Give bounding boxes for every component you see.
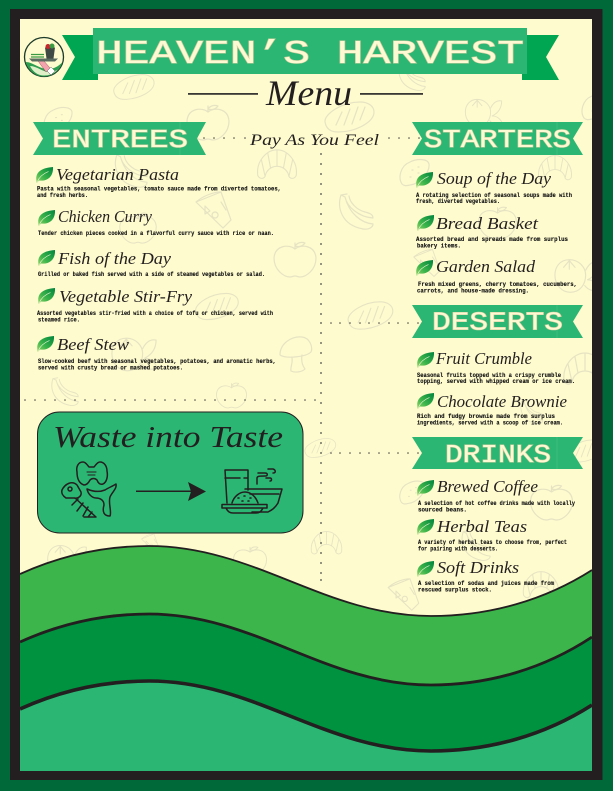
drinks banner: DRINKS xyxy=(445,440,551,470)
item: brewed coffee: sourced beans. xyxy=(418,506,467,514)
entrees banner: ENTREES xyxy=(52,125,188,155)
ribbon tail left xyxy=(62,35,98,80)
item: fish of the day xyxy=(38,249,265,278)
item: chocolate brownie: Chocolate Brownie xyxy=(437,392,567,411)
item: brewed coffee: Brewed Coffee xyxy=(437,477,538,496)
item: chocolate brownie: Rich and fudgy brownie made from surplus xyxy=(417,413,555,420)
item: fish of the day: Grilled or baked fish served with a side of steamed vegetables or salad. xyxy=(38,271,265,278)
item: chocolate brownie xyxy=(417,392,567,426)
item: soup of the day: Soup of the Day xyxy=(437,169,551,188)
item: brewed coffee: A selection of hot coffee drinks made with locally xyxy=(418,500,575,507)
item: bread basket: Assorted bread and spreads made from surplus xyxy=(416,236,568,243)
ribbon main band xyxy=(93,28,527,74)
item: vegetarian pasta xyxy=(36,165,281,199)
wave: mid green xyxy=(20,612,592,750)
item: brewed coffee xyxy=(417,477,575,514)
item: soft drinks: A selection of sodas and juices made from xyxy=(418,580,554,587)
item: soup of the day: fresh, diverted vegetables. xyxy=(416,198,500,205)
item: vegetarian pasta: and fresh herbs. xyxy=(37,192,88,199)
icon: meal xyxy=(222,469,282,513)
item: bread basket: bakery items. xyxy=(417,242,461,250)
item: herbal teas: Herbal Teas xyxy=(436,517,527,536)
item: vegetable stir-fry xyxy=(37,287,273,324)
ribbon tail right xyxy=(522,35,559,80)
item: beef stew: Slow-cooked beef with seasonal vegetables, potatoes, and aromatic herbs, xyxy=(38,358,276,365)
item: fruit crumble: Fruit Crumble xyxy=(435,349,532,368)
menu word: Menu xyxy=(265,73,352,113)
header ribbon xyxy=(62,28,559,80)
item: herbal teas xyxy=(417,517,567,552)
entrees banner xyxy=(33,122,206,155)
item: soup of the day xyxy=(416,169,572,205)
deserts banner: DESERTS xyxy=(432,308,563,338)
panel: drinks items xyxy=(417,477,575,594)
wave: light green xyxy=(20,545,592,684)
item: garden salad: carrots, and house-made dressing. xyxy=(417,288,529,294)
item: soup of the day: A rotating selection of seasonal soups made with xyxy=(416,192,572,199)
arrow xyxy=(136,482,206,501)
panel: starters items xyxy=(416,169,577,294)
drinks banner xyxy=(412,437,583,470)
menu rule right xyxy=(360,93,423,95)
logo xyxy=(24,38,64,76)
item: vegetable stir-fry: steamed rice. xyxy=(38,316,80,324)
wave: teal green xyxy=(20,681,592,771)
tagline: Pay As You Feel xyxy=(249,132,379,149)
starters banner: STARTERS xyxy=(424,125,571,155)
item: bread basket xyxy=(416,214,568,250)
item: vegetarian pasta: Pasta with seasonal vegetables, tomato sauce made from diverted tomatoes, xyxy=(37,186,281,192)
item: beef stew: served with crusty bread or mashed potatoes. xyxy=(38,364,183,372)
callout: waste into taste xyxy=(38,412,303,533)
icon: food waste xyxy=(62,462,116,517)
item: chicken curry: Chicken Curry xyxy=(58,207,152,226)
menu rule left xyxy=(188,93,258,95)
item: garden salad: Fresh mixed greens, cherry tomatoes, cucumbers, xyxy=(418,281,577,288)
item: garden salad xyxy=(416,257,577,294)
item: vegetarian pasta: Vegetarian Pasta xyxy=(56,165,179,184)
item: chicken curry: Tender chicken pieces cooked in a flavorful curry sauce with rice or naan. xyxy=(38,230,274,237)
item: herbal teas: A variety of herbal teas to choose from, perfect xyxy=(418,539,567,546)
callout heading: Waste into Taste xyxy=(53,419,283,454)
item: beef stew: Beef Stew xyxy=(57,335,130,354)
item: chocolate brownie: ingredients, served with a scoop of ice cream. xyxy=(417,420,563,426)
deserts banner xyxy=(412,305,583,338)
item: soft drinks: Soft Drinks xyxy=(437,558,519,577)
item: herbal teas: for pairing with desserts. xyxy=(418,546,498,552)
item: fruit crumble: topping, served with whipped cream or ice cream. xyxy=(417,378,575,385)
item: garden salad: Garden Salad xyxy=(436,257,536,276)
item: bread basket: Bread Basket xyxy=(436,214,539,233)
panel: deserts items xyxy=(417,349,575,426)
item: chicken curry xyxy=(38,207,274,237)
background food doodles xyxy=(44,63,611,610)
item: soft drinks xyxy=(417,558,554,594)
starters banner xyxy=(412,122,583,155)
title: HEAVEN’S HARVEST xyxy=(96,36,524,73)
bottom wave bands xyxy=(20,546,592,771)
panel: entrees items xyxy=(36,165,281,372)
item: soft drinks: rescued surplus stock. xyxy=(418,586,492,594)
item: vegetable stir-fry: Assorted vegetables stir-fried with a choice of tofu or chicken, served with xyxy=(37,310,273,317)
item: fruit crumble xyxy=(417,349,575,385)
item: beef stew xyxy=(37,335,276,372)
item: fish of the day: Fish of the Day xyxy=(57,249,171,268)
item: fruit crumble: Seasonal fruits topped with a crispy crumble xyxy=(417,372,561,379)
dotted dividers xyxy=(24,137,420,581)
item: vegetable stir-fry: Vegetable Stir-Fry xyxy=(59,287,192,306)
